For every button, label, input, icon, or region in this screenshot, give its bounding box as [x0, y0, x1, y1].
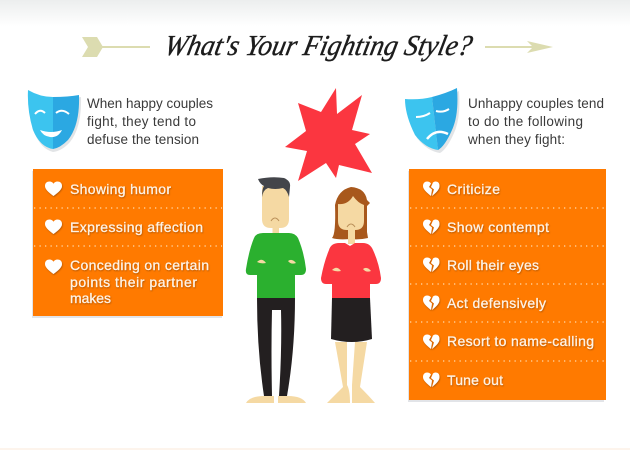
intro text: happy: defuse the tension	[87, 132, 199, 147]
icon: red burst	[285, 88, 372, 181]
intro text: unhappy	[467, 96, 604, 147]
item: show contempt: Show contempt	[447, 219, 549, 235]
item: resort to name-calling: Resort to name-calling	[447, 333, 594, 349]
list card: happy behaviours	[32, 169, 223, 318]
intro text: happy	[87, 96, 213, 147]
item: conceding: Conceding on certain	[70, 257, 209, 273]
title: What's Your Fighting Style?	[162, 30, 476, 62]
item: expressing affection: Expressing affection	[70, 219, 203, 235]
panel: unhappy couples	[405, 88, 606, 402]
item: criticize	[423, 181, 500, 197]
panel: happy couples	[28, 90, 223, 318]
item: roll their eyes: Roll their eyes	[447, 257, 539, 273]
intro text: happy: When happy couples	[87, 96, 213, 111]
item: tune out	[423, 372, 503, 388]
icon: sad mask	[405, 88, 459, 153]
arrow: right	[485, 41, 553, 53]
intro text: unhappy: to do the following	[468, 114, 583, 129]
figure: woman	[321, 187, 381, 403]
title banner	[82, 30, 553, 62]
icon: happy mask	[28, 90, 81, 152]
arrow: left	[82, 37, 150, 57]
intro text: happy: fight, they tend to	[87, 114, 196, 129]
figure: man	[246, 177, 306, 403]
intro text: unhappy: when they fight:	[467, 132, 565, 147]
item: showing humor: Showing humor	[70, 181, 171, 197]
item: conceding: points their partner	[70, 274, 197, 290]
intro text: unhappy: Unhappy couples tend	[468, 96, 604, 111]
item: act defensively: Act defensively	[447, 295, 546, 311]
item: tune out: Tune out	[447, 372, 503, 388]
list card: unhappy behaviours	[408, 169, 606, 402]
item: conceding	[45, 257, 209, 306]
item: conceding: makes	[70, 290, 111, 306]
item: criticize: Criticize	[447, 181, 500, 197]
